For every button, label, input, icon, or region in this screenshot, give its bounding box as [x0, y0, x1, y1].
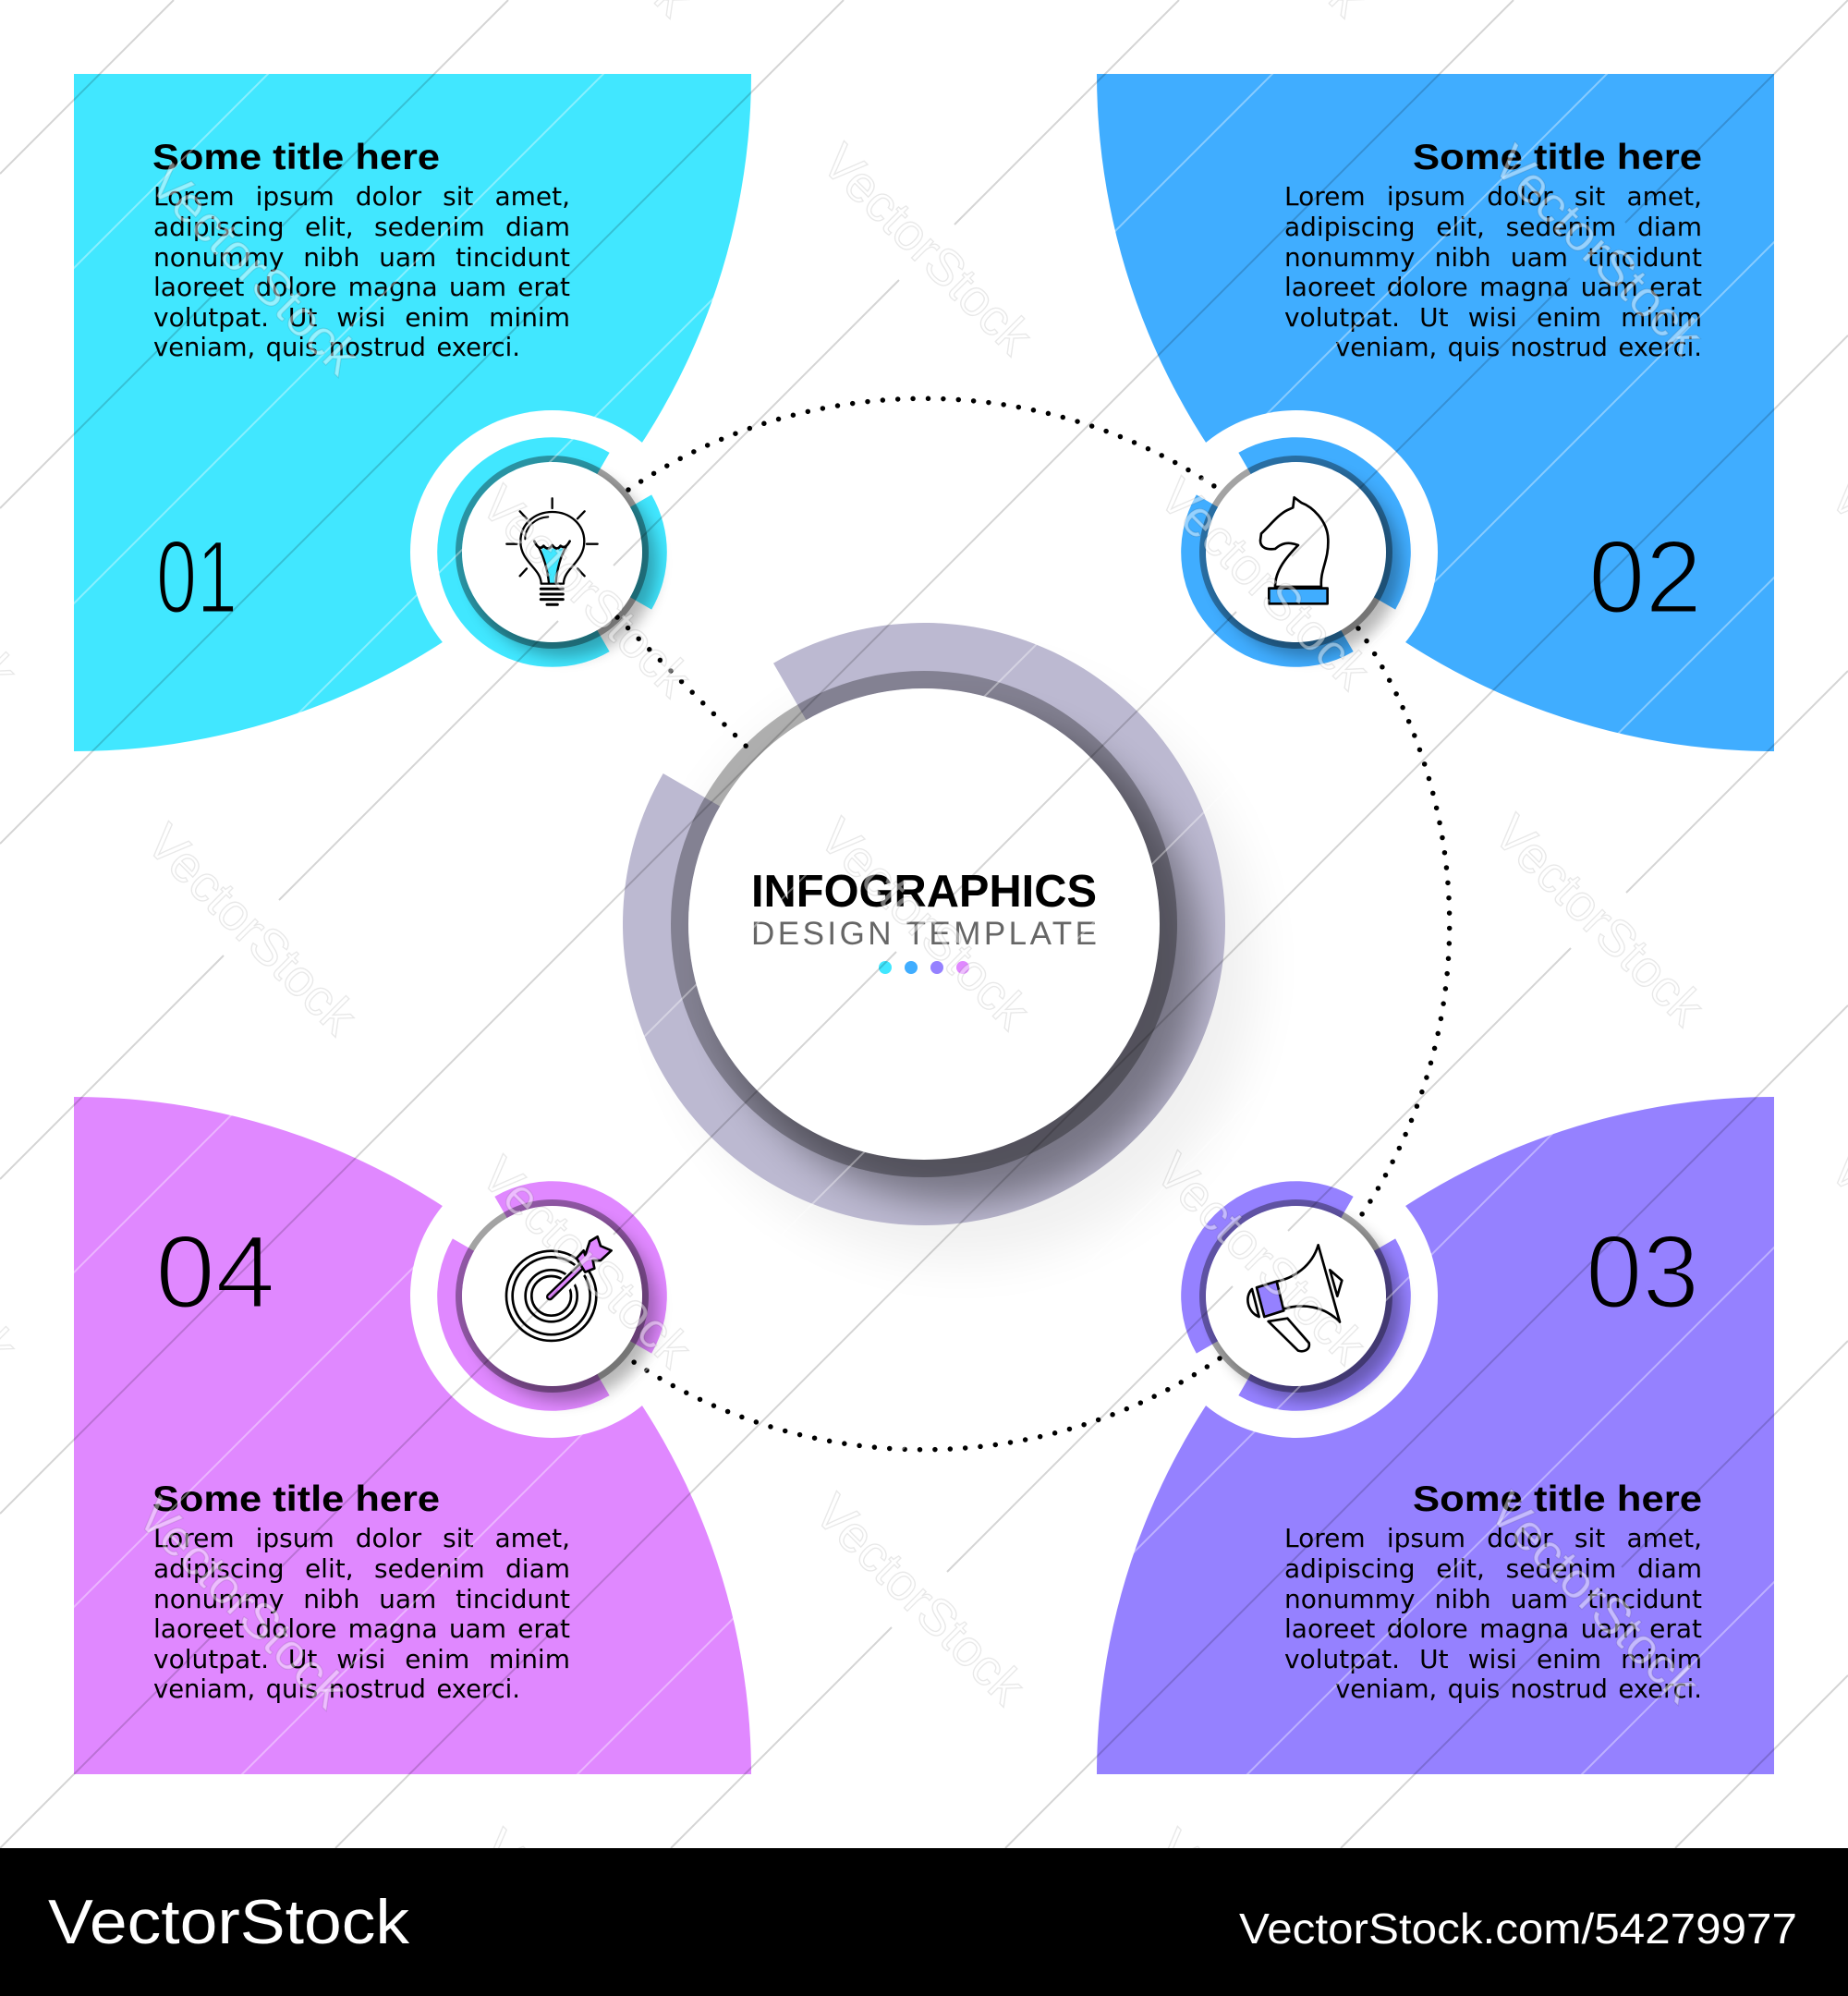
body text 04: adipiscing elit, sedenim diam: [153, 1553, 570, 1584]
body text 01: Lorem ipsum dolor sit amet,: [153, 181, 570, 212]
body text 02: veniam, quis nostrud exerci.: [1335, 334, 1702, 362]
watermark text: VectorStock: [470, 475, 703, 707]
body text 03: adipiscing elit, sedenim diam: [1284, 1553, 1702, 1584]
center soft outer shadow: [665, 670, 1257, 1261]
panel 04: orchid quarter shape: [74, 1097, 751, 1774]
watermark text: VectorStock: [139, 153, 371, 385]
title 02: Some title here: [1413, 138, 1702, 177]
node 04: ring: [437, 1181, 667, 1411]
watermark text: VectorStock: [1482, 134, 1715, 366]
watermark text: VectorStock: [1149, 468, 1381, 700]
body text 01: volutpat. Ut wisi enim minim: [153, 302, 570, 333]
center title: INFOGRAPHICS: [751, 867, 1097, 917]
node 03: ring: [1181, 1181, 1411, 1411]
node 01: ring and bulb icon: [437, 437, 667, 667]
watermark text: VectorStock: [1478, 1481, 1711, 1713]
body text 01: adipiscing elit, sedenim diam: [153, 212, 570, 242]
body text 04: volutpat. Ut wisi enim minim: [153, 1644, 570, 1674]
body text 02: nonummy nibh uam tincidunt: [1284, 242, 1702, 273]
icon: light bulb: [506, 498, 598, 604]
panel 03: violet quarter shape: [1097, 1097, 1774, 1774]
body text 03: veniam, quis nostrud exerci.: [1335, 1675, 1702, 1704]
body text 01: laoreet dolore magna uam erat: [153, 272, 570, 302]
title 03: Some title here: [1413, 1479, 1702, 1519]
title 04: Some title here: [152, 1479, 440, 1519]
body text 02: Lorem ipsum dolor sit amet,: [1284, 181, 1702, 212]
watermark text: VectorStock: [127, 1487, 359, 1719]
dotted connector ring: [617, 398, 1450, 1450]
watermark text: VectorStock: [808, 808, 1041, 1040]
watermark text: VectorStock: [1483, 804, 1716, 1036]
icon: target with arrow: [506, 1236, 612, 1341]
node halos: [410, 410, 1438, 1438]
number 01: 01: [156, 519, 237, 635]
footer logo: VectorStock: [48, 1887, 410, 1957]
node 02: ring: [1181, 437, 1411, 667]
watermark text: VectorStock: [804, 1483, 1037, 1715]
title 01: Some title here: [152, 138, 440, 177]
body text 01: veniam, quis nostrud exerci.: [153, 334, 520, 362]
number 04: 04: [155, 1214, 275, 1330]
body text 04: [153, 1523, 570, 1704]
body text 03: laoreet dolore magna uam erat: [1284, 1613, 1702, 1644]
icon: chess knight: [1260, 497, 1328, 603]
four colour dots: [879, 961, 969, 974]
body text 01: nonummy nibh uam tincidunt: [153, 242, 570, 273]
body text 03: [1284, 1523, 1702, 1704]
body text 04: Lorem ipsum dolor sit amet,: [153, 1523, 570, 1553]
body text 02: volutpat. Ut wisi enim minim: [1284, 302, 1702, 333]
body text 02: [1284, 181, 1702, 362]
footer url: VectorStock.com/54279977: [1239, 1905, 1797, 1953]
body text 01: [153, 181, 570, 362]
body text 03: volutpat. Ut wisi enim minim: [1284, 1644, 1702, 1674]
watermark text: VectorStock: [470, 1146, 703, 1378]
number 02: 02: [1588, 519, 1702, 635]
watermark text: VectorStock: [1145, 1142, 1378, 1374]
panel 01: cyan quarter shape: [74, 74, 751, 751]
center hub: ring, shadow and disc: [623, 623, 1225, 1225]
body text 03: Lorem ipsum dolor sit amet,: [1284, 1523, 1702, 1553]
footer bar: [0, 1848, 1848, 1996]
watermark text: VectorStock: [811, 133, 1044, 365]
center subtitle: DESIGN TEMPLATE: [751, 916, 1097, 952]
body text 04: laoreet dolore magna uam erat: [153, 1613, 570, 1644]
body text 04: nonummy nibh uam tincidunt: [153, 1584, 570, 1614]
number 03: 03: [1586, 1214, 1699, 1330]
body text 02: adipiscing elit, sedenim diam: [1284, 212, 1702, 242]
body text 02: laoreet dolore magna uam erat: [1284, 272, 1702, 302]
body text 03: nonummy nibh uam tincidunt: [1284, 1584, 1702, 1614]
watermark text: VectorStock: [136, 813, 369, 1045]
panel 02: blue quarter shape: [1097, 74, 1774, 751]
icon: megaphone: [1247, 1245, 1342, 1351]
body text 04: veniam, quis nostrud exerci.: [153, 1675, 520, 1704]
